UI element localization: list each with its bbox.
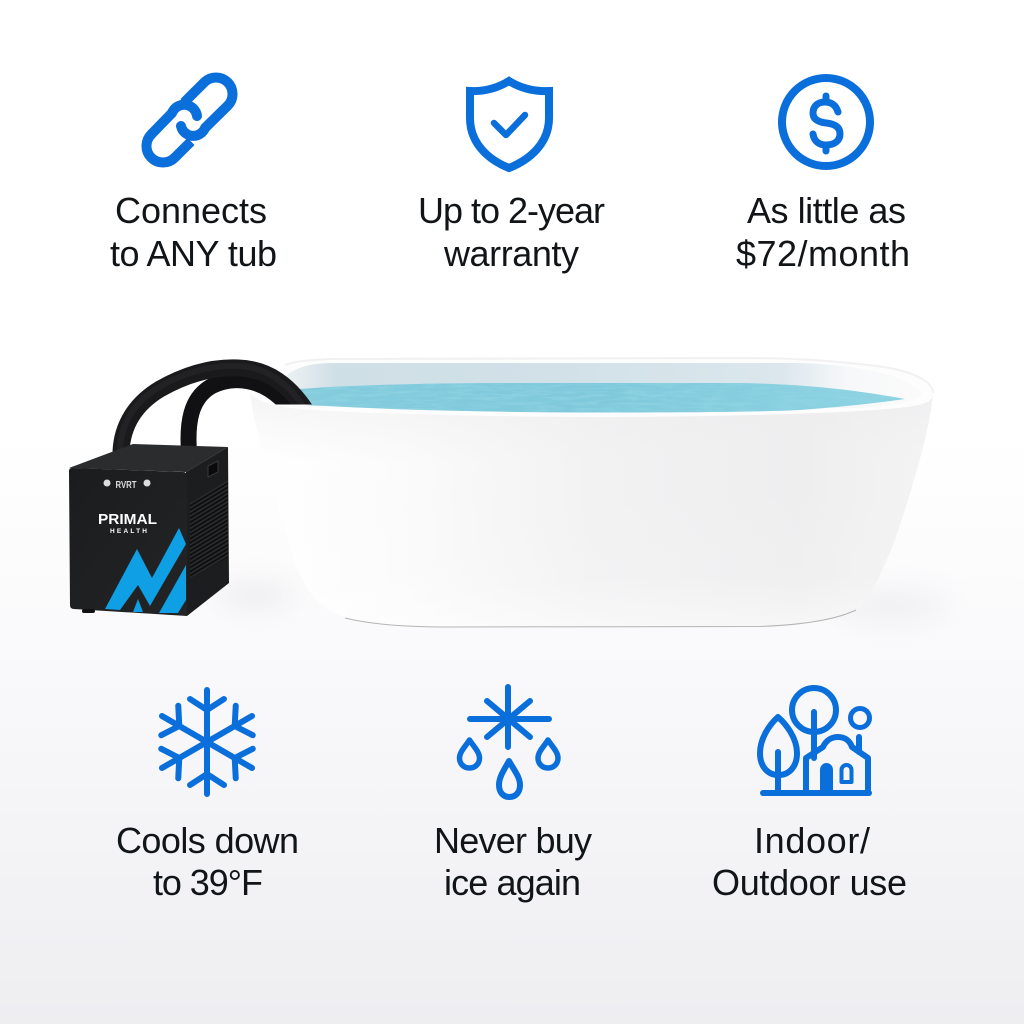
icon: dollar coin (782, 78, 870, 166)
tub rim (250, 358, 933, 417)
icon: chain link (146, 77, 233, 163)
top emblem (104, 480, 150, 491)
label: cools down: Cools down (116, 820, 299, 861)
feature: connects to any tub (110, 77, 277, 274)
icon: ice and water drops (460, 687, 558, 797)
label: warranty: warranty (443, 233, 579, 274)
power switch (208, 461, 218, 477)
water (300, 383, 905, 412)
label: indoor outdoor: Indoor/ (754, 820, 870, 861)
chiller side face (186, 447, 229, 616)
chiller unit (69, 366, 308, 616)
blue brand mark (105, 528, 186, 613)
feature: warranty (418, 81, 605, 274)
label: monthly price: As little as (747, 190, 906, 231)
top emblem: RVRT (116, 480, 136, 491)
label: never buy ice: Never buy (434, 820, 592, 861)
tub and chiller floor shadows (215, 583, 950, 621)
brand logo text: PRIMAL (98, 512, 157, 528)
label: monthly price: $72/month (736, 233, 910, 274)
icon: trees and house (760, 688, 870, 793)
feature: monthly price (736, 78, 910, 274)
feature: never buy ice (434, 687, 592, 903)
side grill (190, 480, 228, 578)
label: warranty: Up to 2-year (418, 190, 605, 231)
icon: shield with check (470, 81, 549, 168)
label: cools down: to 39°F (153, 862, 263, 903)
feature: cools down (116, 690, 299, 903)
tub body (250, 393, 933, 627)
chiller front face (69, 468, 187, 616)
label: connects to any tub: to ANY tub (110, 233, 277, 274)
label: connects to any tub: Connects (115, 190, 267, 231)
water ripples (300, 383, 905, 412)
tub base edge (345, 610, 856, 627)
tub interior wall (272, 363, 922, 408)
tub body shading (250, 393, 933, 627)
brand logo text: HEALTH (110, 528, 147, 535)
rim top edge (285, 358, 933, 393)
feet (82, 609, 95, 613)
chiller top face (69, 444, 228, 472)
icon: snowflake (153, 690, 261, 794)
brand logo text (98, 512, 157, 535)
feature: indoor outdoor (712, 688, 907, 903)
label: indoor outdoor: Outdoor use (712, 862, 907, 903)
hoses (120, 366, 308, 452)
label: never buy ice: ice again (444, 862, 581, 903)
bathtub (250, 358, 933, 627)
